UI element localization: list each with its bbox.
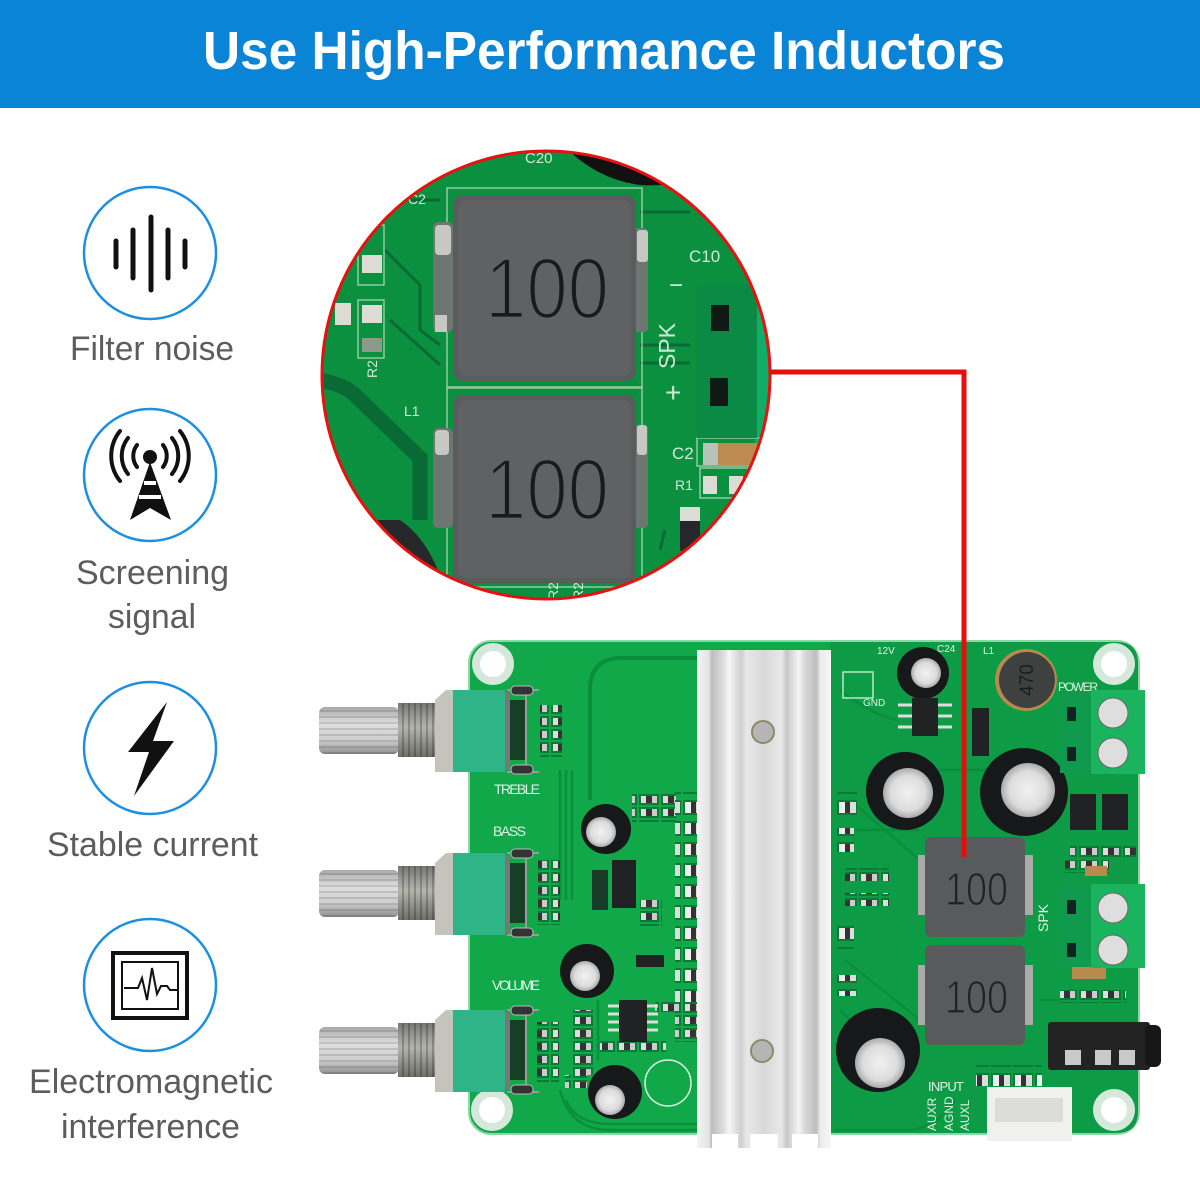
board [469, 641, 1139, 1134]
label: filter noise: Filter noise [70, 330, 234, 368]
magnified silk text: SPK [654, 322, 680, 369]
silkscreen outlines [358, 188, 780, 587]
silk labels: AGND [942, 1096, 956, 1131]
silk labels: AUXL [958, 1099, 972, 1131]
input connector [987, 1087, 1072, 1141]
icon: lightning bolt [84, 682, 216, 814]
label: stable current: Stable current [47, 826, 259, 864]
heatsink [697, 650, 831, 1149]
board inductors [918, 837, 1033, 1045]
magnified silk text: C2 [672, 444, 694, 463]
label: electromagnetic interference: interference [61, 1108, 240, 1146]
silk labels: C24 [937, 644, 956, 655]
icon: signal tower [84, 409, 216, 541]
potentiometers [319, 686, 539, 1094]
inductor side terminals [433, 222, 648, 528]
small coil [995, 649, 1057, 711]
board inductors: 100 [945, 863, 1008, 915]
silk labels: INPUT [928, 1079, 964, 1094]
zoom inductor bottom [453, 395, 636, 583]
silk labels: SPK [1035, 903, 1051, 932]
magnified silk text: C20 [525, 150, 553, 167]
silk labels: GND [863, 698, 885, 709]
silk labels: TREBLE [494, 781, 540, 797]
capacitor C36 outline [645, 1060, 691, 1106]
magnified pads [335, 255, 743, 521]
capacitors [560, 647, 1068, 1119]
label: screening signal: signal [108, 598, 196, 636]
magnified silk text: R2 [545, 582, 561, 600]
panel: circuit board [319, 641, 1161, 1149]
right resistor pads [835, 672, 1136, 1086]
terminal blocks [1060, 690, 1145, 968]
audio jack [1048, 1022, 1161, 1070]
magnified silk text: C10 [689, 247, 720, 266]
magnified traces [320, 200, 690, 550]
magnified silk text: R2 [364, 360, 380, 378]
magnified silk text: C2 [408, 191, 426, 207]
magnified silk text [364, 150, 720, 600]
magnified silk text: − [669, 272, 683, 299]
label: electromagnetic interference [29, 1063, 273, 1146]
copper traces [560, 658, 1060, 1130]
silk labels: POWER [1058, 680, 1098, 694]
left resistor pads [537, 705, 697, 1088]
mounting holes [475, 647, 1131, 1127]
bottom capacitor edge [377, 520, 438, 570]
top capacitor edge [572, 154, 662, 186]
magnified silk text: R1 [675, 477, 693, 493]
magnified silk text: + [665, 377, 681, 408]
small coil: 470 [1017, 664, 1038, 696]
silk labels: AUXR [925, 1097, 939, 1131]
magnified terminal [697, 285, 757, 438]
icon: sound wave filter noise [84, 187, 216, 319]
zoom inductor top: 100 [485, 241, 609, 337]
magnified silk text: R2 [570, 582, 586, 600]
arrow: callout connector line [771, 372, 964, 857]
silk labels [492, 644, 1098, 1131]
silk labels: 12V [877, 646, 895, 657]
icon: oscilloscope [84, 919, 216, 1051]
silk labels: BASS [493, 823, 526, 839]
zoom inductor bottom: 100 [485, 442, 609, 538]
silk labels: L1 [983, 646, 995, 657]
label: screening signal [76, 554, 229, 636]
title banner: Use High-Performance Inductors [203, 21, 1005, 81]
panel: magnified inductors [320, 150, 780, 602]
label: electromagnetic interference: Electromagnetic [29, 1063, 273, 1101]
zoom inductor top [453, 195, 636, 381]
label: screening signal: Screening [76, 554, 229, 592]
magnified silk text: L1 [404, 403, 420, 419]
small chips [592, 698, 1128, 1042]
panel: benefits list [29, 187, 273, 1146]
title banner [0, 0, 1200, 108]
board inductors: 100 [945, 971, 1008, 1023]
silk labels: VOLUME [492, 977, 540, 993]
